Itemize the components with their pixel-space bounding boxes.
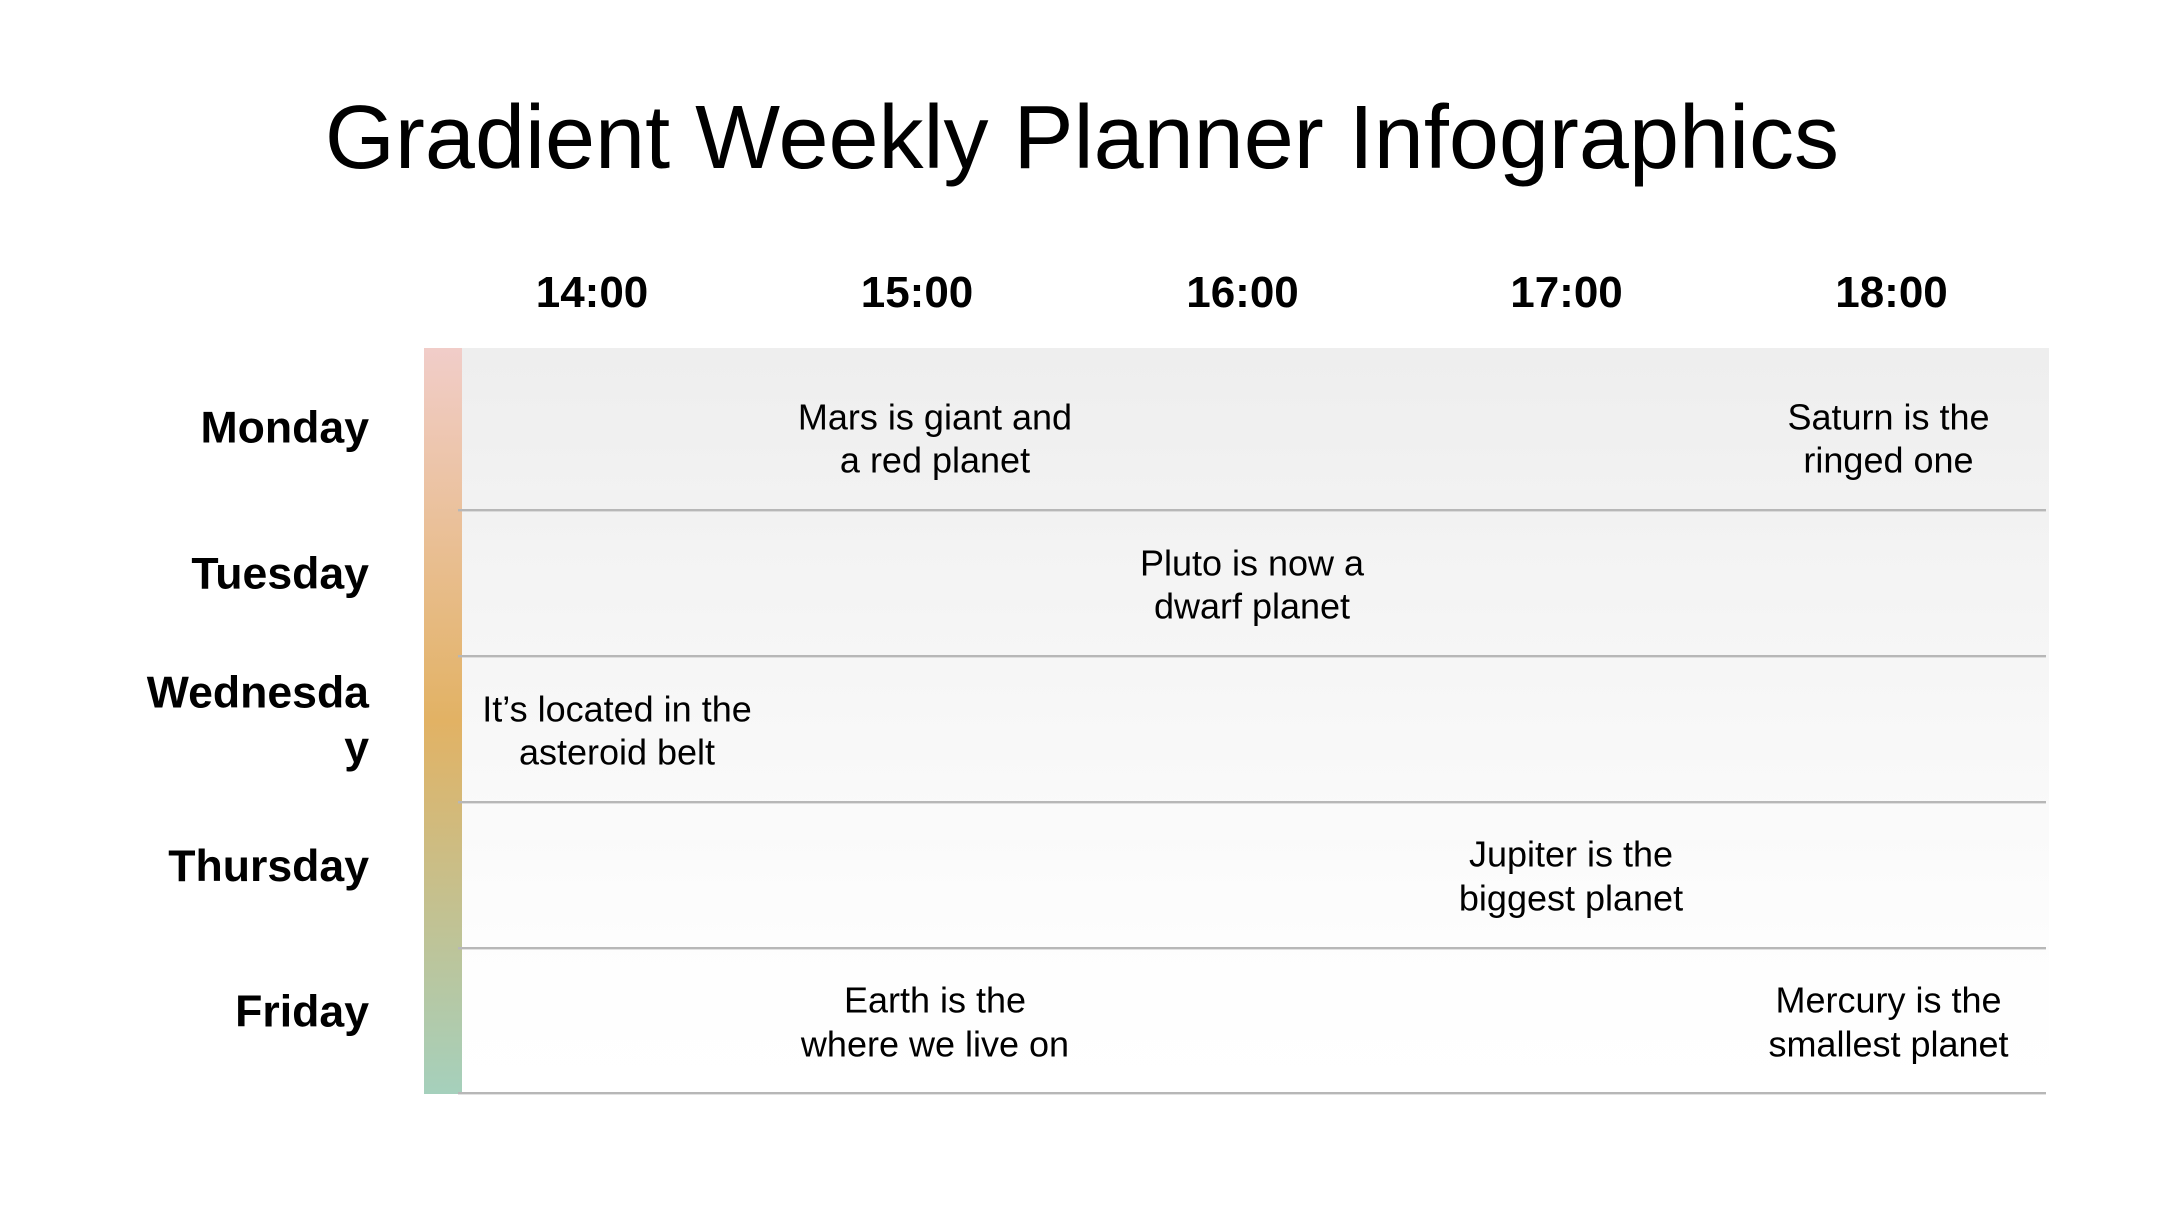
gradient side bar (424, 348, 462, 1094)
entry: Friday 18:00: Mercury is the (1775, 980, 2002, 1020)
entry: Friday 15:00: where we live on (800, 1023, 1069, 1064)
day: Tuesday: Tuesday (191, 550, 369, 598)
day: Wednesday: Wednesda (147, 668, 370, 718)
entry: Monday 18:00: Saturn is the (1787, 396, 1990, 437)
entry: Wednesday 14:00: It’s located in the (482, 688, 752, 729)
entry: Friday 18:00: smallest planet (1768, 1023, 2009, 1064)
entry: Tuesday 16:00: dwarf planet (1154, 585, 1350, 626)
day: Friday: Friday (235, 988, 369, 1036)
entry: Thursday 17:00: Jupiter is the (1469, 834, 1673, 874)
panel background (462, 348, 2049, 1094)
time: 17:00: 17:00 (1510, 268, 1623, 317)
entry: Friday 15:00: Earth is the (844, 980, 1026, 1020)
entry: Thursday 17:00: biggest planet (1459, 877, 1683, 918)
day: Monday: Monday (201, 404, 369, 452)
day: Thursday: Thursday (168, 842, 369, 891)
time: 18:00: 18:00 (1835, 268, 1948, 317)
time header row (536, 268, 1948, 317)
day: Wednesday: y (344, 723, 369, 772)
entry: Monday 18:00: ringed one (1803, 439, 1974, 480)
time: 15:00: 15:00 (861, 268, 973, 317)
entry: Monday 15:00: a red planet (840, 439, 1030, 480)
entry: Wednesday 14:00: asteroid belt (519, 731, 715, 772)
schedule grid panel (458, 348, 2049, 1094)
day labels (147, 404, 370, 1036)
entry: Tuesday 16:00: Pluto is now a (1140, 542, 1365, 583)
time: 14:00: 14:00 (536, 268, 648, 317)
title: Gradient Weekly Planner Infographics (325, 88, 1839, 188)
time: 16:00: 16:00 (1186, 268, 1299, 317)
entry: Monday 15:00: Mars is giant and (798, 396, 1072, 437)
